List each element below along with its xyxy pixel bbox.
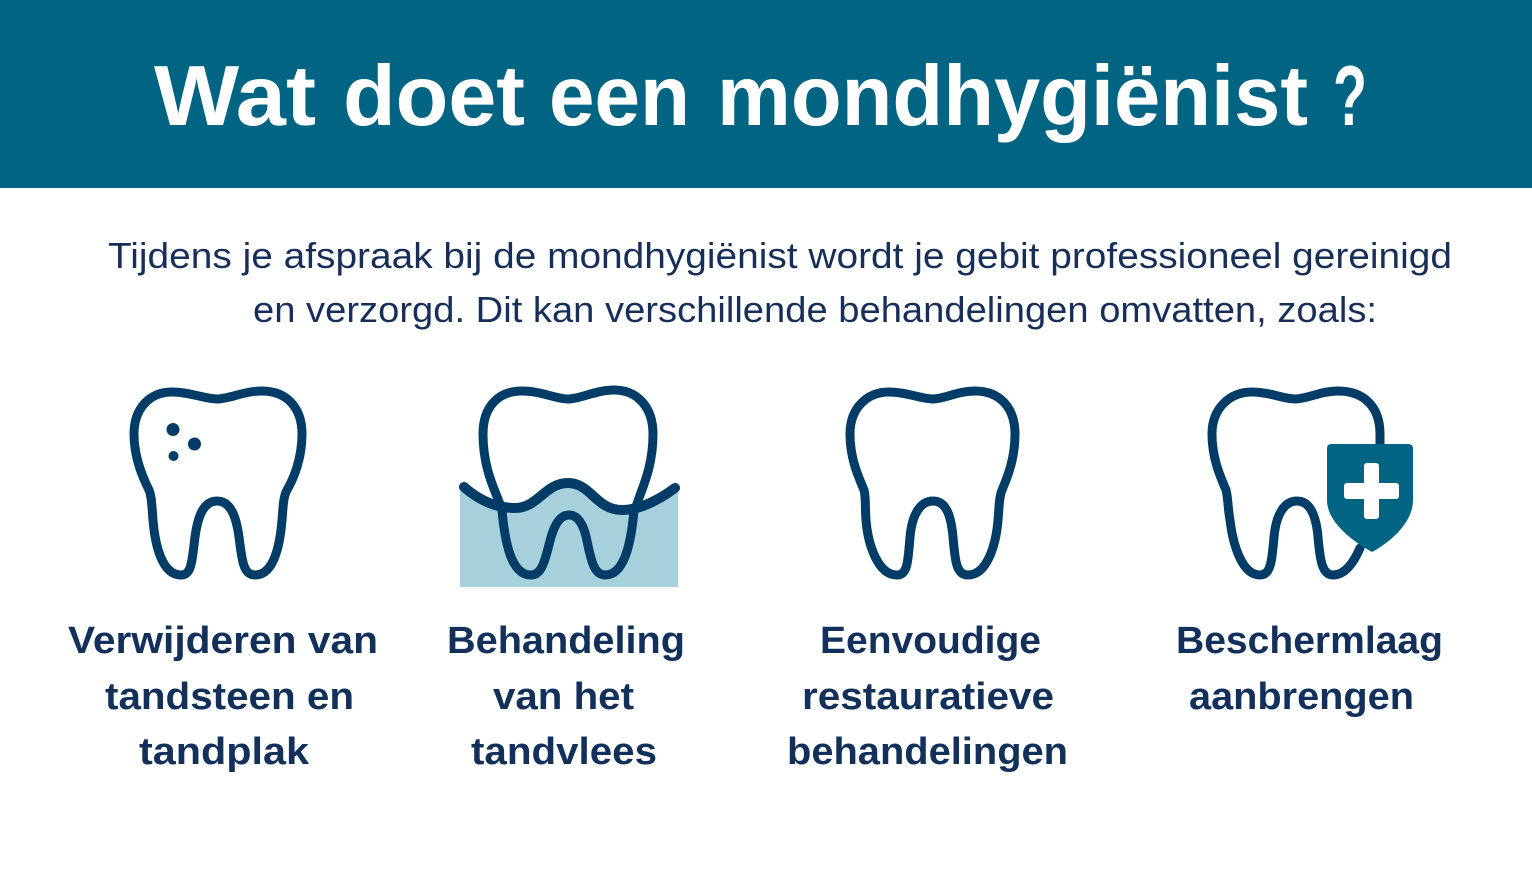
title: ? xyxy=(1333,49,1367,144)
label: tandplak xyxy=(139,731,310,773)
label xyxy=(1176,620,1443,718)
intro text: en verzorgd. Dit kan verschillende behandelingen omvatten, zoals: xyxy=(253,289,1377,330)
label xyxy=(68,620,378,773)
intro text xyxy=(108,235,1452,330)
icon: tooth in gums xyxy=(460,390,678,587)
title: een xyxy=(549,49,690,144)
label: aanbrengen xyxy=(1189,676,1414,718)
panel: tandvlees xyxy=(447,390,685,773)
label: Eenvoudige xyxy=(820,620,1041,662)
label: tandsteen en xyxy=(105,676,354,718)
label xyxy=(787,620,1068,773)
label: restauratieve xyxy=(802,676,1054,718)
icon: tooth outline xyxy=(850,391,1015,575)
label: tandvlees xyxy=(471,731,657,773)
header banner xyxy=(0,0,1532,188)
icon: tooth with shield xyxy=(1212,391,1413,575)
panel: tandsteen en tandplak xyxy=(68,391,378,773)
panel: restauratieve behandelingen xyxy=(787,391,1068,773)
title: Wat xyxy=(154,49,316,144)
label: van het xyxy=(493,676,634,718)
title: mondhygiënist xyxy=(717,49,1308,144)
label: Verwijderen van xyxy=(68,620,378,662)
title: doet xyxy=(343,49,525,144)
intro text: Tijdens je afspraak bij de mondhygiënist wordt je gebit professioneel gereinigd xyxy=(108,235,1452,276)
panel: beschermlaag xyxy=(1176,391,1443,718)
label: Beschermlaag xyxy=(1176,620,1443,662)
label xyxy=(447,620,685,773)
label: Behandeling xyxy=(447,620,685,662)
label: behandelingen xyxy=(787,731,1068,773)
icon: tooth with plaque dots xyxy=(134,391,302,575)
